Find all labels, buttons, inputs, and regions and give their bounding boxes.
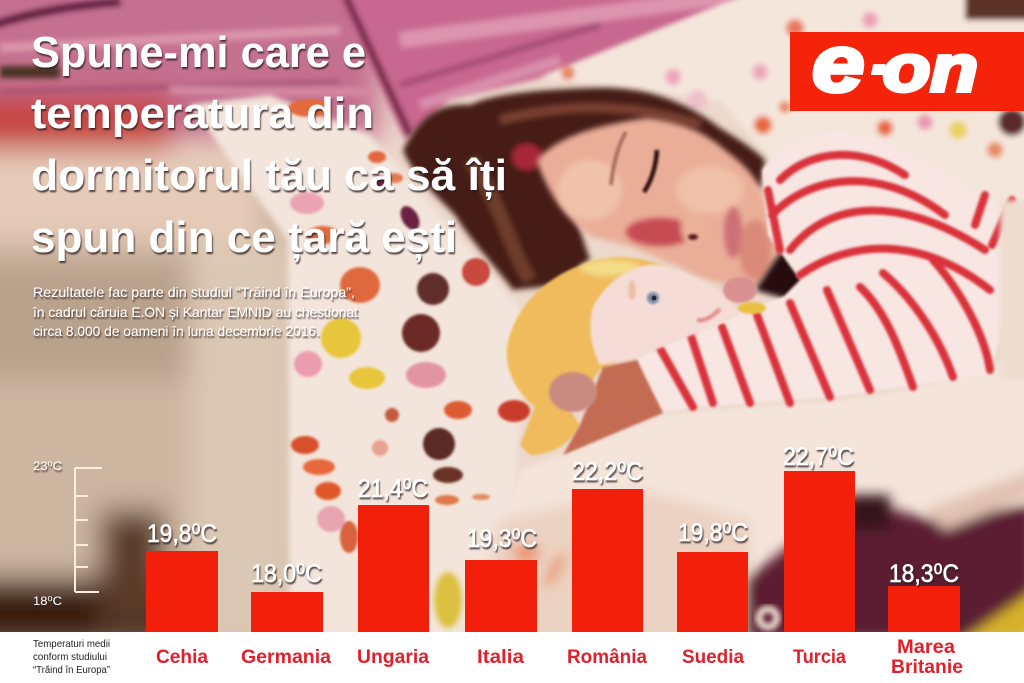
title: Spune-mi care e: [31, 28, 366, 77]
bar values: 22,7⁰C: [783, 443, 854, 471]
photo: bedding at the upper right: [540, 0, 1024, 240]
title: spun din ce țară ești: [31, 213, 457, 262]
logo: E.ON: e: [812, 19, 864, 108]
chart note: Temperaturi medii: [33, 638, 110, 650]
country labels: Suedia: [682, 647, 744, 668]
title: temperatura din: [31, 89, 374, 138]
intro paragraph: în cadrul căruia E.ON și Kantar EMNID au chestionat: [32, 304, 358, 320]
intro paragraph: Rezultatele fac parte din studiul “Trăind în Europa”,: [33, 284, 355, 300]
bar values: [147, 443, 959, 588]
chart note: “Trăind în Europa”: [33, 664, 110, 676]
country labels: Italia: [477, 647, 524, 668]
photo: lower blanket: [470, 350, 1024, 640]
bar values: 22,2⁰C: [572, 458, 643, 486]
logo: E.ON: ·: [869, 43, 887, 95]
photo: closed eye: [644, 150, 657, 192]
country labels: România: [567, 647, 647, 668]
intro paragraph: circa 8.000 de oameni în luna decembrie 2016.: [33, 323, 320, 339]
intro paragraph: [32, 284, 358, 339]
country labels: Germania: [241, 647, 331, 668]
country labels: Cehia: [156, 647, 208, 668]
chart note: [33, 638, 110, 676]
chart axis: 18⁰C: [33, 594, 62, 608]
photo: face: [537, 118, 778, 290]
photo: shadow under chin: [755, 240, 830, 300]
title: dormitorul tău ca să îți: [31, 151, 507, 200]
chart axis: [33, 459, 102, 608]
logo: E.ON: on: [883, 32, 978, 106]
country labels: Britanie: [891, 657, 963, 678]
country labels: Ungaria: [357, 647, 429, 668]
photo: striped pink pillow at the top: [335, 0, 760, 140]
country labels: Marea: [897, 637, 955, 658]
white footer strip: [0, 632, 1024, 683]
photo: knitted doll: [507, 257, 766, 455]
bar values: 19,8⁰C: [147, 520, 217, 548]
chart axis: 23⁰C: [33, 459, 62, 473]
photo: pink stripes top left: [0, 2, 370, 92]
country labels: [156, 637, 963, 678]
photo: blurred room on the left: [0, 0, 380, 650]
photo: dotted pillow: [190, 95, 530, 640]
chart note: conform studiului: [33, 651, 107, 663]
bar values: 18,3⁰C: [889, 560, 959, 588]
bar values: 21,4⁰C: [358, 475, 428, 503]
bar values: 18,0⁰C: [251, 560, 322, 588]
bar chart: bedroom temperatures: [146, 443, 960, 632]
title: [31, 28, 507, 262]
photo: hair: [403, 88, 765, 290]
photo: striped shirt: [637, 132, 1024, 412]
logo: E.ON: [790, 19, 1024, 111]
country labels: Turcia: [793, 647, 846, 668]
bar values: 19,8⁰C: [678, 519, 748, 547]
bar values: 19,3⁰C: [467, 525, 537, 553]
